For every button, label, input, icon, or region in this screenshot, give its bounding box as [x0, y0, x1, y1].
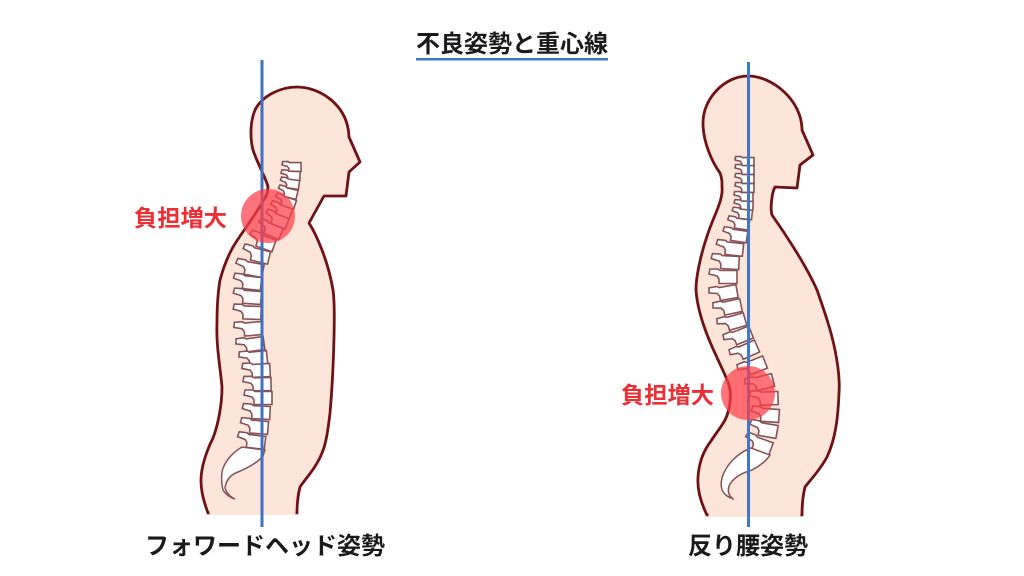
gravity line [747, 62, 750, 527]
label: increased load, left: 負担増大 [134, 205, 227, 231]
figure: sway back posture [696, 62, 839, 527]
bottom edge cover [708, 513, 800, 517]
figure: forward head posture [201, 60, 360, 527]
bottom edge cover [210, 511, 296, 515]
sacrum [721, 448, 770, 499]
body silhouette [696, 76, 839, 515]
body silhouette [201, 87, 360, 513]
label: forward head posture: フォワードヘッド姿勢 [145, 533, 385, 560]
spine [232, 162, 301, 449]
spine [708, 157, 780, 455]
highlight circle [241, 189, 295, 243]
sacrum [222, 447, 265, 499]
label: sway back posture: 反り腰姿勢 [688, 533, 808, 560]
highlight circle [721, 366, 775, 420]
label: increased load, right: 負担増大 [621, 382, 714, 408]
gravity line [260, 60, 264, 527]
title: 不良姿勢と重心線 [416, 31, 608, 58]
